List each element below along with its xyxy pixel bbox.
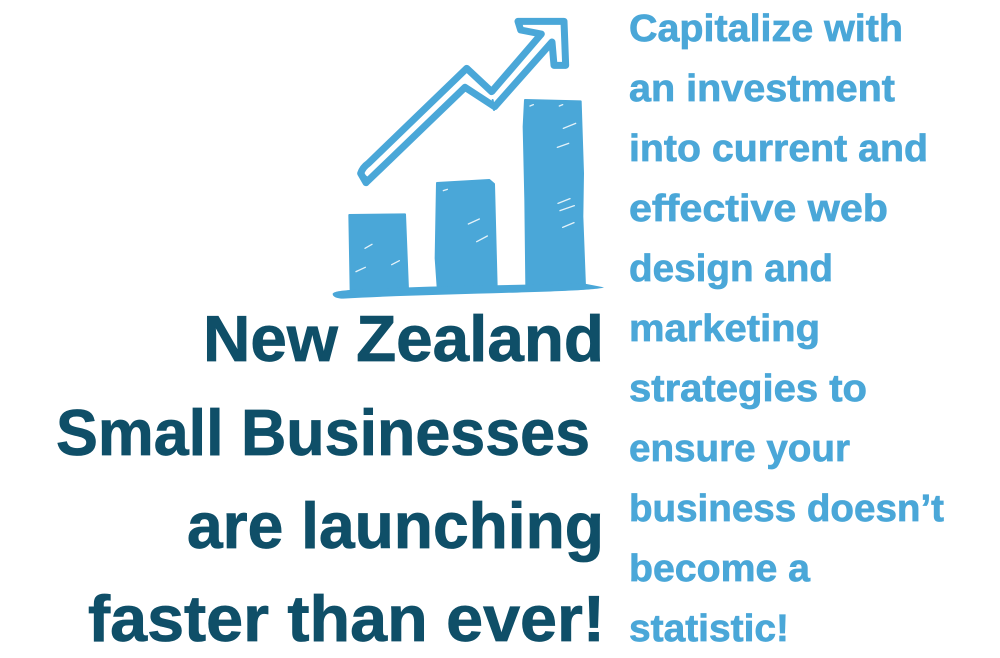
- text block: call to action: strategies to: [629, 368, 867, 410]
- heading: New Zealand Small Businesses are launching faster than ever!: Small Businesses: [56, 396, 590, 469]
- text block: call to action: become a: [629, 548, 811, 590]
- icon: zigzag up arrow: [361, 21, 566, 183]
- heading: New Zealand Small Businesses are launching faster than ever!: faster than ever!: [88, 582, 605, 655]
- text block: call to action: business doesn’t: [629, 488, 944, 530]
- heading: New Zealand Small Businesses are launching faster than ever!: New Zealand: [203, 302, 604, 375]
- text block: call to action: effective web: [629, 188, 888, 230]
- bar chart: three rising bars with baseline: [333, 100, 604, 299]
- text block: call to action: [629, 8, 944, 650]
- text block: call to action: into current and: [629, 128, 928, 170]
- heading: New Zealand Small Businesses are launching faster than ever!: are launching: [187, 489, 604, 562]
- icon: hand-drawn rising bar chart with arrow: [333, 21, 604, 299]
- text block: call to action: statistic!: [629, 608, 789, 650]
- text block: call to action: Capitalize with: [629, 8, 903, 50]
- text block: call to action: an investment: [629, 68, 895, 110]
- heading: New Zealand Small Businesses are launching faster than ever!: [56, 302, 605, 655]
- text block: call to action: marketing: [629, 308, 820, 350]
- text block: call to action: ensure your: [629, 428, 850, 470]
- text block: call to action: design and: [629, 248, 833, 290]
